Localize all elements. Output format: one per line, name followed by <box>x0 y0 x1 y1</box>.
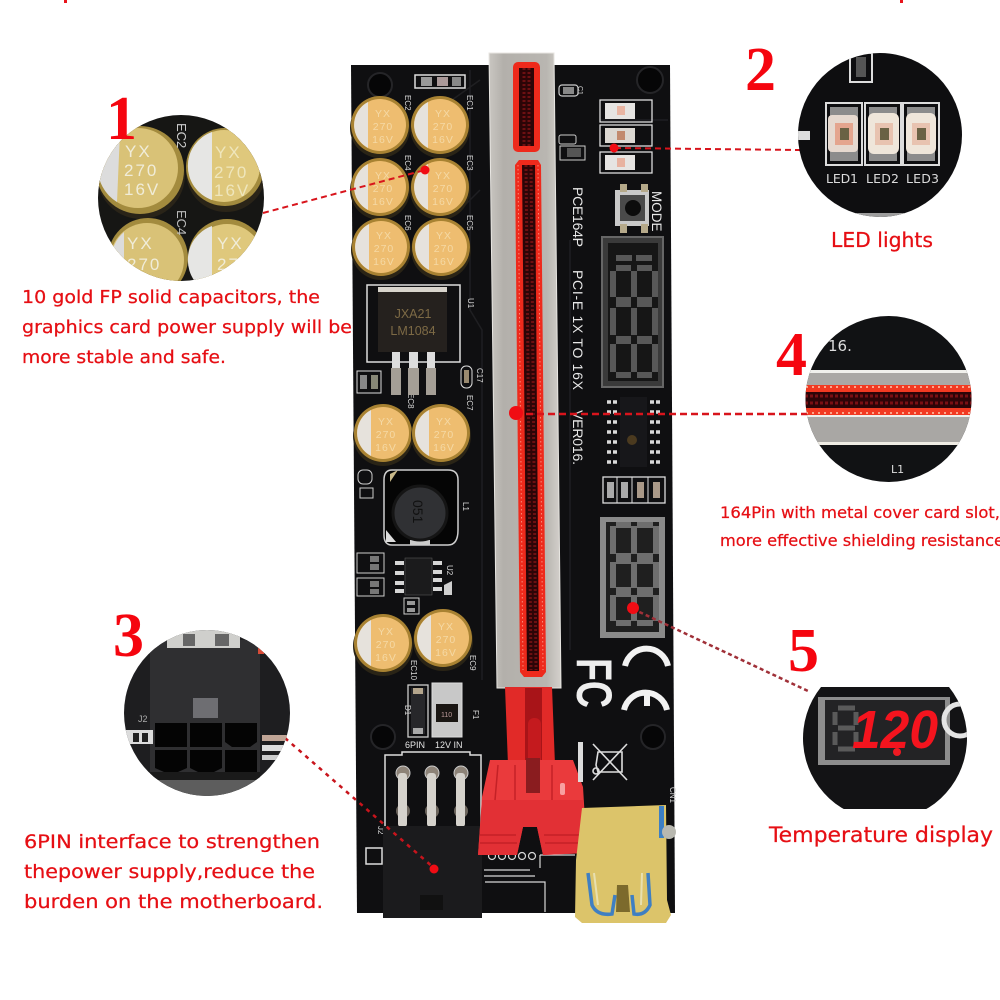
capacitor EC1: YX <box>435 108 451 120</box>
capacitor EC8: 270 <box>376 429 396 441</box>
short slot <box>513 62 540 152</box>
inductor L1: 051 <box>410 500 426 524</box>
capacitor EC5: 16V <box>433 256 455 268</box>
6PIN and 12V IN silkscreen: 6PIN <box>405 740 425 750</box>
capacitor silkscreen labels: C17 <box>475 368 484 383</box>
white bar <box>578 742 583 782</box>
text block: capacitors: graphics card power supply will be <box>22 317 352 338</box>
capacitor EC9: YX <box>438 621 454 633</box>
capacitor silkscreen labels: EC2 <box>403 95 412 111</box>
number 3: 3 <box>113 602 144 670</box>
capacitor silkscreen labels: F1 <box>471 710 480 720</box>
callout circle 1: capacitors: 270 <box>124 161 158 180</box>
four digit display <box>602 237 663 387</box>
USB 3.0 port <box>575 805 676 923</box>
MODE button <box>615 184 664 233</box>
inductor L1 <box>384 470 458 545</box>
three digit display <box>600 517 665 638</box>
capacitor silkscreen labels: J2 <box>376 826 385 835</box>
board text VER016: VER016. <box>570 410 586 465</box>
regulator chip LM1084: JXA21 <box>395 307 431 321</box>
capacitor silkscreen labels: EC4 <box>403 155 412 171</box>
capacitor silkscreen labels: U2 <box>445 565 454 576</box>
board text PCI-E 1X TO 16X: PCI-E 1X TO 16X <box>570 270 586 391</box>
capacitor EC6: 270 <box>374 243 394 255</box>
callout circle 1: capacitors: YX <box>215 143 242 162</box>
callout circle 4: card slot: 16. <box>828 337 852 355</box>
diode D1 and fuse F1: 110 <box>441 712 452 719</box>
text block: card slot: 164Pin with metal cover card slot, <box>720 503 1000 522</box>
capacitor EC7: 16V <box>433 442 455 454</box>
red fragments at top edge <box>64 0 903 3</box>
diode D1 and fuse F1 <box>408 683 462 737</box>
text block: card slot <box>720 503 1000 550</box>
capacitor EC3: YX <box>435 170 451 182</box>
callout circle 3: 6-pin connector <box>120 628 295 800</box>
dashed leader to LED lights <box>610 144 800 152</box>
callout circle 3: 6-pin connector: J2 <box>138 714 148 724</box>
regulator chip LM1084: LM1084 <box>390 324 436 338</box>
dashed leader to 6 pin connector <box>285 738 438 874</box>
capacitor EC9: 16V <box>435 647 457 659</box>
LED 1 <box>826 103 862 165</box>
capacitor silkscreen labels: U1 <box>466 298 475 309</box>
capacitor silkscreen labels: EC5 <box>465 215 474 231</box>
C1 C2 R20 parts: C1 <box>576 86 583 95</box>
board text PCE164P: PCE164P <box>570 187 586 247</box>
number 4: 4 <box>776 321 807 389</box>
capacitor EC1: 270 <box>433 121 453 133</box>
capacitor EC9: 270 <box>436 634 456 646</box>
capacitor EC6: 16V <box>373 256 395 268</box>
regulator chip LM1084 <box>367 285 460 395</box>
callout circle 5: temperature display <box>800 687 976 809</box>
6PIN and 12V IN silkscreen: 12V IN <box>435 740 463 750</box>
callout circle 2: LED lights: LED1 <box>826 171 858 186</box>
LED pads on board <box>600 100 652 173</box>
callout circle 1: capacitors: 16V <box>214 181 250 200</box>
capacitor silkscreen labels: EC7 <box>465 395 474 411</box>
capacitor EC7: 270 <box>434 429 454 441</box>
number 5: 5 <box>788 617 819 685</box>
red latch <box>478 687 587 855</box>
capacitor silkscreen labels: CN1 <box>668 787 677 804</box>
circuit board <box>350 65 677 918</box>
capacitor silkscreen labels: D1 <box>403 705 412 716</box>
capacitor EC8: YX <box>378 416 394 428</box>
WEEE bin icon <box>593 744 627 780</box>
capacitor EC1: 16V <box>432 134 454 146</box>
LED 2 <box>865 103 901 165</box>
callout circle 2: LED lights <box>795 50 965 220</box>
dashed leader to capacitor callout <box>263 166 430 213</box>
capacitor EC2 <box>350 96 410 158</box>
text block: 6 pin interface <box>24 831 323 913</box>
callout circle 1: capacitors: YX <box>127 234 154 253</box>
capacitor EC2: 270 <box>373 121 393 133</box>
capacitor EC4: 16V <box>372 196 394 208</box>
number 2: 2 <box>745 36 776 104</box>
capacitor silkscreen labels: EC10 <box>409 660 418 681</box>
text block: capacitors: 10 gold FP solid capacitors, the <box>22 287 320 308</box>
6-pin connector body <box>366 826 482 918</box>
dashed leader to card slot callout <box>509 406 808 420</box>
callout circle 1: capacitors <box>98 115 264 281</box>
callout circle 1: capacitors: YX <box>217 234 244 253</box>
capacitor EC10 <box>353 614 413 676</box>
capacitor EC1 <box>410 96 470 158</box>
capacitor EC3: 270 <box>433 183 453 195</box>
text block: capacitors: more stable and safe. <box>22 347 226 368</box>
resistor row <box>603 477 665 503</box>
capacitor EC9 <box>413 609 473 671</box>
capacitor silkscreen labels: L1 <box>461 502 470 511</box>
callout circle 2: LED lights: LED2 <box>866 171 899 186</box>
capacitor EC5: YX <box>436 230 452 242</box>
capacitor EC7: YX <box>436 416 452 428</box>
small SMD parts <box>357 366 472 614</box>
capacitor silkscreen labels: EC3 <box>465 155 474 171</box>
6PIN and 12V IN silkscreen <box>405 740 463 750</box>
capacitor EC4: 270 <box>373 183 393 195</box>
capacitor EC8: 16V <box>375 442 397 454</box>
capacitor EC8 <box>353 404 413 466</box>
text block: temperature display: Temperature display <box>768 823 993 847</box>
capacitor EC5 <box>411 218 471 280</box>
capacitor silkscreen labels: EC9 <box>468 655 477 671</box>
callout circle 1: capacitors: 270 <box>214 163 248 182</box>
callout circle 1: capacitors: 27 <box>217 255 240 274</box>
dashed leader to temperature display <box>627 602 808 691</box>
capacitor EC2: YX <box>375 108 391 120</box>
capacitor EC6: YX <box>376 230 392 242</box>
capacitor silkscreen labels: EC6 <box>403 215 412 231</box>
chip U3 <box>607 397 661 467</box>
MODE button: MODE <box>649 191 664 232</box>
text block: card slot: more effective shielding resistance <box>720 531 1000 550</box>
capacitor EC3: 16V <box>432 196 454 208</box>
capacitor EC10: 16V <box>375 652 397 664</box>
LED 3 <box>903 103 939 165</box>
text block: 6 pin interface: 6PIN interface to strengthen <box>24 831 320 853</box>
FCC mark: FC <box>566 658 622 708</box>
capacitor silkscreen labels: EC1 <box>465 95 474 111</box>
callout circle 1: capacitors: 270 <box>127 255 161 274</box>
chip U2 <box>395 558 452 595</box>
capacitor EC4 <box>350 158 410 220</box>
capacitor EC2: 16V <box>372 134 394 146</box>
PCIe slot metal cover <box>489 53 561 688</box>
capacitor EC7 <box>411 404 471 466</box>
callout circle 1: capacitors: EC4 <box>174 210 189 235</box>
callout circle 1: capacitors: YX <box>125 142 152 161</box>
callout circle 2: LED lights: LED3 <box>906 171 939 186</box>
callout circle 4: card slot <box>806 316 972 482</box>
C1 C2 R20 parts <box>559 85 585 160</box>
capacitor EC4: YX <box>375 170 391 182</box>
text block: capacitors <box>22 287 352 368</box>
CE mark <box>624 649 668 710</box>
capacitor silkscreen labels <box>376 95 677 835</box>
number 1: 1 <box>106 85 137 153</box>
capacitor EC10: 270 <box>376 639 396 651</box>
mounting holes <box>368 67 665 749</box>
long slot <box>515 160 546 677</box>
callout circle 4: card slot: L1 <box>891 463 904 476</box>
text block: 6 pin interface: burden on the motherboard. <box>24 891 323 913</box>
capacitor EC3 <box>410 158 470 220</box>
capacitor silkscreen labels: EC8 <box>406 393 415 409</box>
J2 silkscreen and pins <box>385 752 481 828</box>
text block: 6 pin interface: thepower supply,reduce the <box>24 861 315 883</box>
callout circle 1: capacitors: EC2 <box>174 123 189 148</box>
text block: LED lights: LED lights <box>831 228 933 252</box>
capacitor EC10: YX <box>378 626 394 638</box>
red temperature reading: 120 <box>852 700 938 760</box>
capacitor EC6 <box>351 218 411 280</box>
callout circle 1: capacitors: 16V <box>124 180 160 199</box>
top resistors <box>415 75 465 88</box>
silkscreen near latch <box>484 850 575 912</box>
capacitor EC5: 270 <box>434 243 454 255</box>
